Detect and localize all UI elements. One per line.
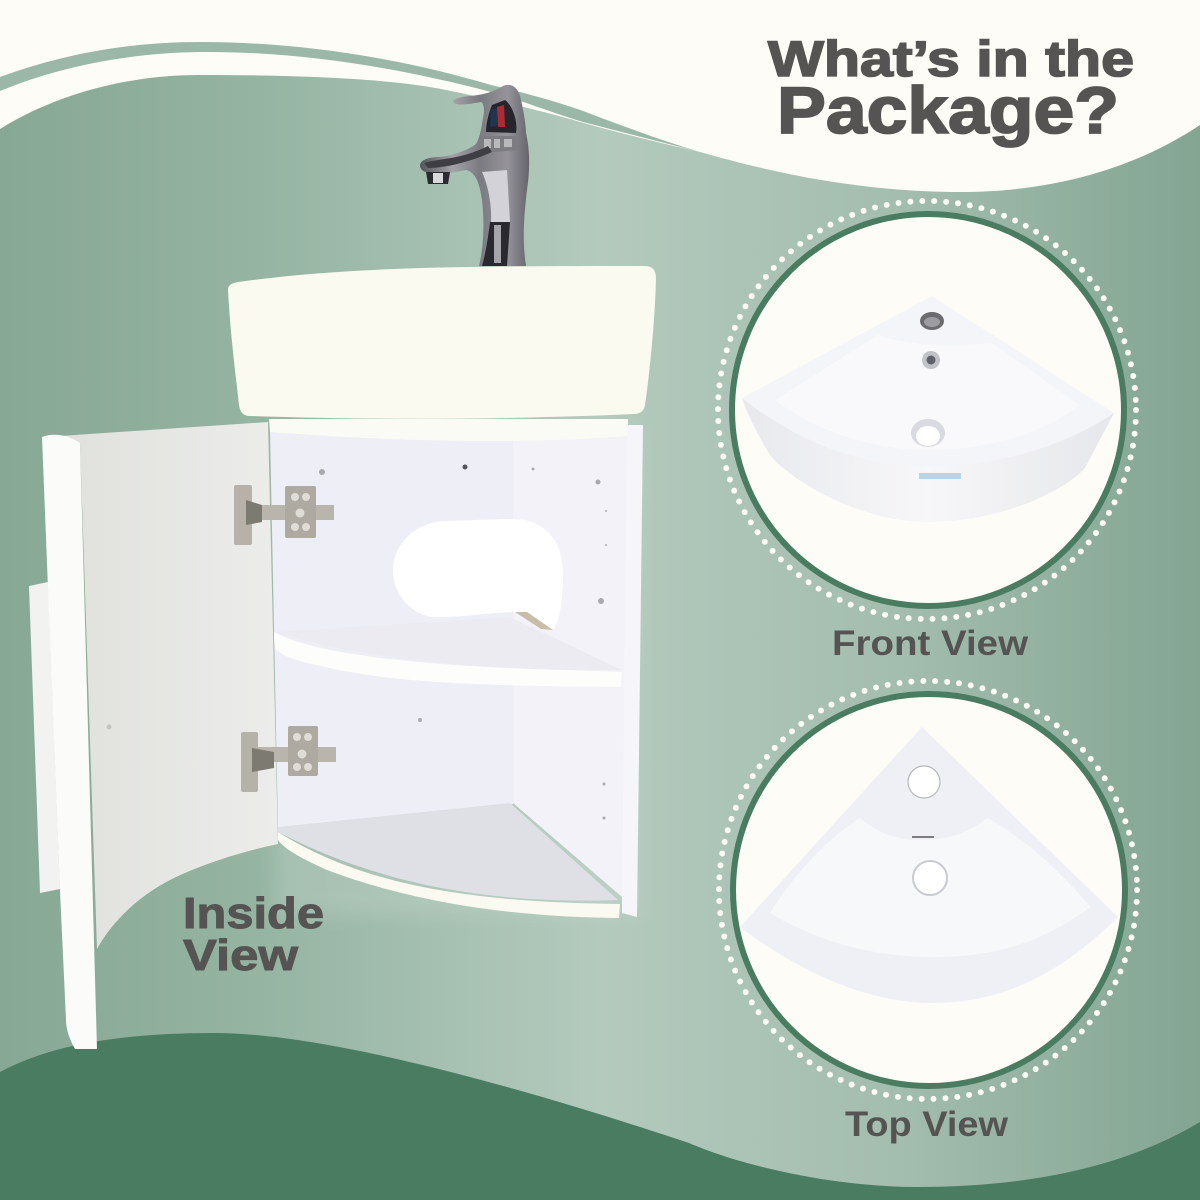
panel: front view (718, 201, 1136, 619)
door screw (106, 724, 112, 730)
back-right panel (513, 436, 627, 897)
bottom hinge (241, 726, 336, 792)
label: inside view (183, 889, 324, 980)
back-left panel (270, 430, 513, 828)
caption: top view: Top View (845, 1105, 1009, 1144)
product: corner sink cabinet (29, 85, 656, 1049)
label: inside view: Inside (183, 889, 324, 938)
door inner face (60, 422, 278, 949)
title: Package? (777, 73, 1119, 147)
shelf holes (319, 464, 607, 820)
circle frame (733, 694, 1125, 1086)
circle frame (732, 214, 1124, 606)
pipe cutout (393, 519, 563, 630)
bottom dark green wave (0, 1033, 1200, 1200)
cutout edge (515, 612, 553, 630)
title: What’s in the (768, 31, 1134, 87)
bottom shelf (278, 803, 620, 918)
label: inside view: View (183, 931, 299, 980)
title (768, 31, 1134, 147)
top cream wave (0, 0, 1200, 192)
open door (42, 422, 278, 1049)
top hinge (234, 485, 334, 545)
dotted ring (718, 201, 1136, 619)
right side strip (622, 425, 643, 917)
top swoosh accent (0, 42, 700, 152)
shadow behind cabinet (270, 430, 640, 915)
cabinet body (269, 419, 643, 918)
dotted ring (719, 681, 1137, 1099)
icon: top basin (740, 727, 1118, 1003)
middle shelf (274, 617, 622, 687)
door front edge (42, 435, 97, 1049)
caption: front view: Front View (832, 624, 1029, 663)
door handle (29, 582, 60, 893)
basin (228, 266, 656, 419)
panel: top view (719, 681, 1137, 1099)
icon: front basin (742, 296, 1114, 522)
top lip (269, 419, 628, 441)
faucet (420, 85, 529, 266)
